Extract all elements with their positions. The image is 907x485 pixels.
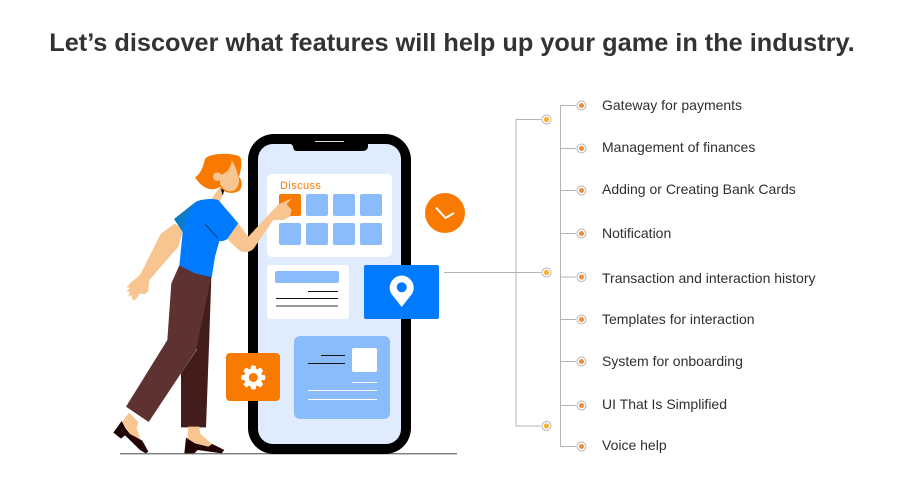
back arm and hand [126,223,183,301]
trousers [126,265,211,427]
card: profile [294,336,390,419]
ground line [120,453,457,454]
card: discuss [267,174,392,257]
phone illustration [248,134,411,454]
phone screen [258,144,401,444]
list nodes [577,101,586,451]
feature list: Gateway for payments [602,97,742,113]
icon: chevron circle [425,193,465,233]
phone notch [291,144,368,151]
head, shirt and pointing arm [174,154,292,277]
feature list: Templates for interaction [602,311,755,327]
feature list [602,97,815,453]
card: discuss: Discuss [280,180,321,192]
feature list: System for onboarding [602,353,743,369]
feature list: Adding or Creating Bank Cards [602,181,796,197]
feature list: Voice help [602,437,667,453]
primary nodes [542,115,551,430]
title: Let’s discover what features will help up your game in the industry. [49,29,855,57]
icon: location card [364,265,439,319]
phone body [248,134,411,454]
feet and shoes [113,413,224,453]
feature list: UI That Is Simplified [602,396,727,412]
connector lines [444,106,576,446]
feature list: Transaction and interaction history [602,270,815,286]
feature list: Notification [602,225,671,241]
icon: gear card [226,353,280,401]
connector tree [444,101,586,451]
card: text lines [267,265,349,319]
feature list: Management of finances [602,139,755,155]
illustration: woman pointing at phone [113,154,292,453]
